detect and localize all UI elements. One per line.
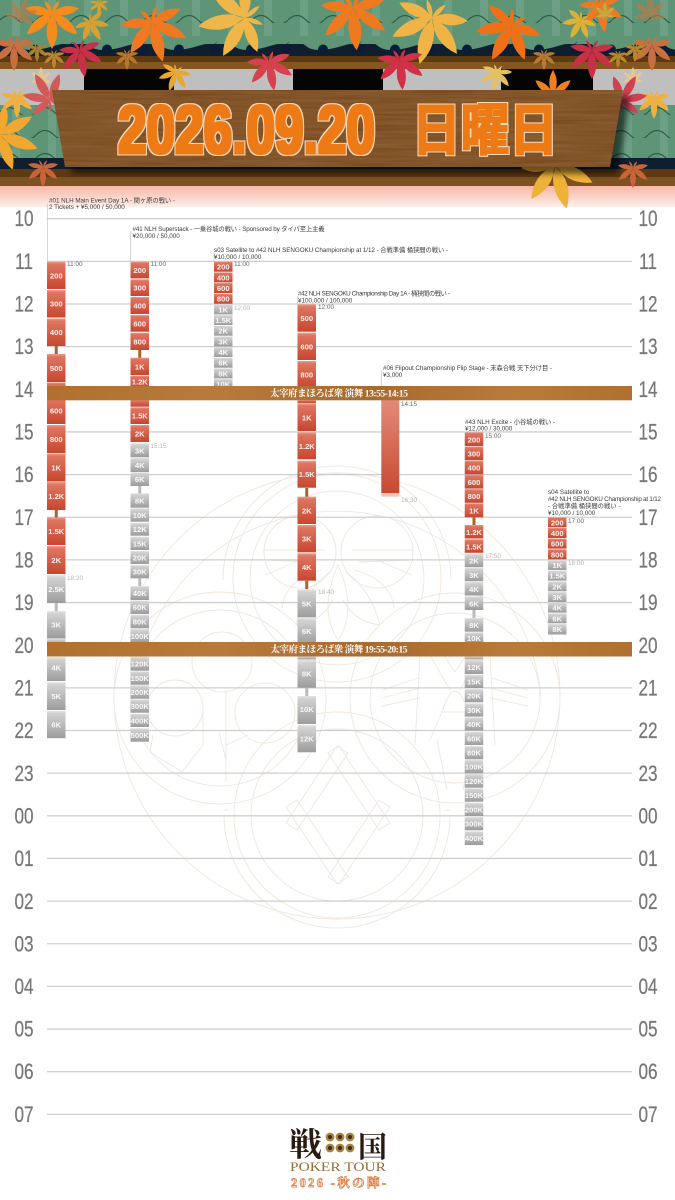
blind levels: 5K [51,692,62,701]
hour labels right: 13 [638,335,658,360]
start and late-reg times: 11:00 [67,261,83,268]
blind levels: 800 [468,492,480,501]
performance band 1 [47,386,632,400]
performance band 1: 太宰府まほろば衆 演舞 13:55-14:15 [270,388,408,400]
blind levels: 200 [133,266,146,275]
blind levels [298,304,316,752]
blind levels: 4K [469,585,479,594]
blind levels: 60K [467,734,481,744]
blind levels: 6K [552,614,563,623]
hour labels left: 20 [14,634,34,659]
hour labels right: 02 [638,890,658,915]
blind levels: 100K [465,763,484,772]
blind levels: 800 [217,295,230,304]
blind levels: 8K [135,496,145,506]
start and end times: 14:15 [401,401,417,408]
blind levels: 600 [133,319,146,328]
hour labels left: 12 [14,293,34,317]
event title: #42 NLH SENGOKU Championship Day 1A - 桶狭間の戦い - [298,288,450,298]
event s03 satellite [214,245,448,389]
blind levels: 1K [302,414,312,423]
start and late-reg times: 15:00 [485,433,501,440]
event title: ¥10,000 / 10,000 [214,254,262,261]
blind levels: 15K [467,678,481,686]
blind levels: 1.2K [48,492,65,501]
hour labels left: 19 [14,591,34,616]
blind levels: 600 [300,342,313,351]
blind levels: 12K [300,735,314,744]
hour labels right: 22 [638,719,658,744]
blind levels: 2K [302,506,312,515]
blind levels: 2K [469,557,479,566]
maple leaves behind sign [0,0,671,217]
hour labels right: 14 [638,378,658,403]
hour grid lines [47,219,632,1114]
event title: 2 Tickets + ¥5,000 / 50,000 [49,204,125,211]
blind levels: 12K [467,663,481,672]
hour labels left: 21 [14,677,34,701]
blind levels: 200 [468,435,480,444]
hour labels right [638,207,658,1128]
hour labels right: 04 [638,975,658,1000]
date heading: 2026.09.20 [118,92,375,168]
hour labels right: 05 [638,1018,658,1042]
blind levels: 1K [51,464,62,472]
event s04 satellite [548,489,661,634]
blind levels: 3K [51,621,62,630]
blind levels: 20K [467,692,481,701]
start and end times [401,401,417,504]
event title: #06 Flipout Championship Flip Stage - 末森合戦 天下分け目 - [383,363,552,372]
blind levels: 200 [551,518,564,527]
hour labels left: 01 [14,847,34,872]
wooden sign [52,90,630,174]
blind levels: 600 [468,478,480,487]
hour labels right: 07 [638,1103,658,1128]
blind levels: 2.5K [48,585,65,594]
hour labels left: 23 [14,762,34,787]
blind levels: 8K [552,625,563,634]
event title: - 合戦準備 桶狭間の戦い - [548,501,620,510]
logo edition: 2026 -秋の陣- [291,1175,386,1190]
blind levels: 3K [218,337,229,346]
blind levels: 1.5K [215,316,232,325]
blind levels: 60K [133,603,147,612]
blind levels: 800 [133,337,146,346]
blind levels: 4K [218,348,229,357]
logo kanji: 戦 [289,1119,323,1166]
hour labels left: 04 [14,975,34,1000]
blind levels: 400 [133,301,146,310]
hour labels left: 00 [14,805,34,829]
hour labels right: 15 [638,421,658,445]
blind levels: 200K [465,806,484,814]
event title: s04 Satellite to [548,489,590,496]
blind levels: 10K [216,380,231,389]
hour labels left: 14 [14,378,34,403]
hour labels left: 03 [14,933,34,957]
blind levels: 1.2K [132,378,148,386]
event title: ¥10,000 / 10,000 [548,510,596,517]
blind levels: 30K [133,568,147,577]
blind levels: 200 [217,263,230,272]
start and late-reg times [150,261,167,450]
event title: #41 NLH Superstack - 一乗谷城の戦い - Sponsored by タイパ至上主義 [132,224,325,233]
hour labels left: 16 [14,463,34,488]
hour labels left: 06 [14,1060,34,1085]
blind levels [465,432,484,845]
hour labels right: 17 [638,506,658,531]
blind levels: 40K [467,720,481,729]
blind levels: 30K [467,706,481,715]
hour labels left: 13 [14,335,34,360]
blind levels: 15K [133,539,147,548]
blind levels: 6K [51,720,62,730]
blind levels: 400K [465,834,484,843]
blind levels: 500K [131,731,149,740]
start and late-reg times: 17:50 [485,553,501,560]
flip stage bar [381,400,399,497]
hour labels right: 00 [638,805,658,829]
maple leaves in front of sign [0,102,648,188]
event title: #01 NLH Main Event Day 1A - 関ヶ原の戦い - [49,196,175,204]
blind levels: 3K [135,446,145,455]
blind levels: 300K [131,702,149,711]
blind levels: 2K [51,556,62,565]
event 06 flipout [381,363,552,504]
hour labels left: 11 [15,250,33,275]
blind levels: 400 [217,273,230,282]
performance band 2 [47,642,632,656]
start and late-reg times: 11:00 [234,261,250,268]
hour labels left: 17 [14,506,34,531]
hour labels right: 11 [639,250,657,275]
start and late-reg times: 18:00 [568,560,584,567]
blind levels: 100K [131,632,149,641]
start and late-reg times: 17:00 [568,518,584,525]
hour labels left: 18 [14,549,34,573]
blind levels: 200K [131,688,149,697]
event title [214,245,448,261]
start and late-reg times [234,261,250,312]
event title [298,288,450,304]
start and late-reg times: 12:00 [318,304,334,311]
logo kanji: 国 [358,1125,387,1166]
logo [289,1119,387,1190]
hour labels left: 22 [14,719,34,744]
hour labels right: 03 [638,933,658,957]
blind levels: 8K [302,669,312,678]
blind levels: 4K [51,664,62,673]
blind levels [47,262,66,738]
event 01 main event [47,196,175,738]
start and late-reg times [485,433,501,560]
blind levels: 1.5K [132,412,148,421]
hour labels right: 01 [638,847,658,872]
blind levels: 80K [467,749,481,758]
blind levels: 10K [467,634,481,643]
event title: ¥20,000 / 50,000 [132,233,180,240]
hour labels right: 10 [638,207,658,232]
blind levels: 120K [465,777,484,786]
event 43 excite [465,417,555,845]
event title [132,224,325,240]
logo kanji [289,1119,387,1166]
blind levels: 8K [469,621,479,630]
blind levels: 6K [135,475,145,484]
event title: #43 NLH Excite - 小谷城の戦い - [465,417,555,426]
blind levels: 3K [302,535,312,544]
blind levels: 3K [469,571,479,580]
blind levels: 150K [465,791,484,800]
blind levels: 20K [133,554,147,562]
blind levels [548,517,566,634]
blind levels: 3K [552,593,563,602]
hour labels left: 15 [14,421,34,445]
blind levels: 400 [50,328,63,337]
performance band 2: 太宰府まほろば衆 演舞 19:55-20:15 [270,644,408,656]
blind levels: 4K [302,563,312,572]
start and late-reg times: 18:20 [67,575,83,582]
blind levels: 400K [131,716,149,725]
blind levels [130,262,149,742]
blind levels: 1.5K [48,527,65,536]
blind levels: 1.5K [299,470,315,479]
blind levels: 200 [50,271,63,280]
blind levels: 300 [133,284,146,293]
blind levels: 4K [135,461,145,470]
blind levels: 2K [552,582,563,591]
start and late-reg times [568,518,584,567]
blind levels: 1K [135,362,145,371]
event title: ¥3,000 [383,372,403,379]
blind levels [214,262,232,389]
start and late-reg times [67,261,83,582]
blind levels: 6K [218,359,229,368]
blind levels: 2K [218,327,229,336]
blind levels: 80K [133,618,147,626]
event title [548,489,661,517]
blind levels: 10K [300,705,314,714]
hour labels right: 18 [638,549,658,573]
start and late-reg times [318,304,334,596]
blind levels: 300K [465,820,484,829]
blind levels: 8K [218,369,229,378]
blind levels: 1.5K [466,542,483,551]
blind levels: 400 [551,529,564,538]
blind levels: 600 [551,540,564,549]
hour labels left: 05 [14,1018,34,1042]
blind levels: 800 [50,435,63,444]
blind levels: 1.5K [549,572,566,581]
hour labels left [14,207,34,1128]
hour labels left: 10 [14,207,34,232]
blind levels: 6K [469,599,479,608]
event title: ¥12,000 / 30,000 [465,426,513,432]
blind levels: 2K [135,430,145,438]
blind levels: 10K [133,511,147,520]
blind levels: 300 [50,300,63,309]
blind levels: 600 [50,406,63,416]
event 41 superstack [130,224,325,742]
start and late-reg times: 11:00 [150,261,166,268]
event title [465,417,555,432]
background crest [114,466,560,928]
hour labels left: 07 [14,1103,34,1128]
blind levels: 1K [552,561,563,570]
blind levels: 1K [218,305,229,314]
start and late-reg times: 12:00 [234,305,250,312]
hour labels right: 12 [638,293,658,317]
blind levels: 6K [302,627,312,636]
logo chips [326,1133,354,1152]
hour labels right: 16 [638,463,658,488]
start and late-reg times: 15:15 [150,443,167,450]
blind levels: 600 [217,284,230,293]
blind levels: 4K [552,604,563,613]
hour labels right: 20 [638,634,658,659]
blind levels: 500 [50,364,63,373]
blind levels: 800 [300,370,313,380]
hour labels right: 21 [638,677,658,701]
hour labels right: 06 [638,1060,658,1085]
header roof artwork [0,0,675,207]
start and late-reg times: 18:40 [318,589,334,596]
hour labels right: 19 [638,591,658,616]
blind levels: 300 [468,450,480,458]
weekday heading: 日曜日 [412,86,558,167]
event title [49,196,175,211]
hour labels right: 23 [638,762,658,787]
event title [383,363,552,379]
blind levels: 800 [551,550,564,559]
logo wordmark: POKER TOUR [290,1159,386,1174]
blind levels: 1.2K [299,442,315,451]
event title: ¥100,000 / 100,000 [298,298,353,304]
blind levels: 12K [133,525,147,534]
blind levels: 500 [300,314,313,323]
event 42 sengoku championship [298,288,450,752]
event title: #42 NLH SENGOKU Championship at 1/12 [548,496,661,503]
blind levels: 150K [131,674,149,683]
blind levels: 1.2K [466,528,483,537]
event title: s03 Satellite to #42 NLH SENGOKU Championship at 1/12 - 合戦準備 桶狭間の戦い - [214,245,448,254]
hour labels left: 02 [14,890,34,915]
blind levels: 120K [131,660,149,669]
start and end times: 16:30 [401,497,417,504]
blind levels: 40K [133,589,147,598]
blind levels: 1K [469,506,479,515]
blind levels: 5K [302,599,312,608]
blind levels: 400 [468,464,480,473]
